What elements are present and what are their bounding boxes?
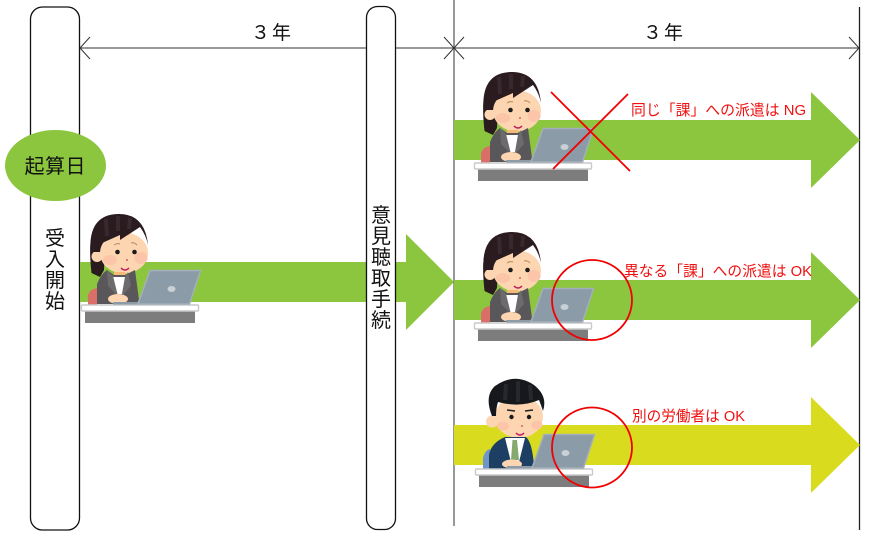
end line xyxy=(858,7,860,530)
period divider line xyxy=(453,0,455,526)
row 2 label: 異なる「課」への派遣は OK xyxy=(624,263,812,280)
middle pillar label: 取 xyxy=(371,268,391,290)
row 2 arrow xyxy=(454,252,860,348)
pillar label: 開 xyxy=(45,270,65,292)
row 2 worker xyxy=(474,232,594,341)
row 2 OK circle xyxy=(552,260,632,340)
dimension arrow: first 3 years xyxy=(80,37,454,59)
start date badge: 起算日: 起算日 xyxy=(24,155,86,178)
first period arrow xyxy=(80,234,454,330)
row 3 worker: man xyxy=(476,379,594,487)
left timeline pillar: 受入開始 xyxy=(30,7,80,530)
label: first 3 years: ３年 xyxy=(251,22,291,44)
row 1 cross mark xyxy=(551,92,630,171)
row 3 OK circle xyxy=(552,408,632,488)
dimension arrow: second 3 years xyxy=(454,37,859,59)
start date badge: 起算日 xyxy=(5,130,106,201)
middle pillar label: 続 xyxy=(371,309,391,332)
pillar label: 入 xyxy=(45,249,65,271)
middle pillar label: 見 xyxy=(371,226,391,248)
pillar label: 始 xyxy=(45,290,65,313)
row 1 worker xyxy=(474,72,594,181)
middle pillar label: 聴 xyxy=(371,246,391,269)
row 1 arrow xyxy=(454,92,860,188)
row 3 label: 別の労働者は OK xyxy=(632,408,745,425)
row 1 label: 同じ「課」への派遣は NG xyxy=(631,102,806,119)
middle pillar: 意見聴取手続 xyxy=(366,6,396,530)
row 3 arrow xyxy=(454,397,860,493)
pillar label: 受 xyxy=(45,227,65,250)
label: second 3 years: ３年 xyxy=(643,22,683,44)
middle pillar label: 手 xyxy=(371,288,391,311)
figure: worker in first period xyxy=(82,214,200,323)
middle pillar label: 意 xyxy=(371,204,391,227)
